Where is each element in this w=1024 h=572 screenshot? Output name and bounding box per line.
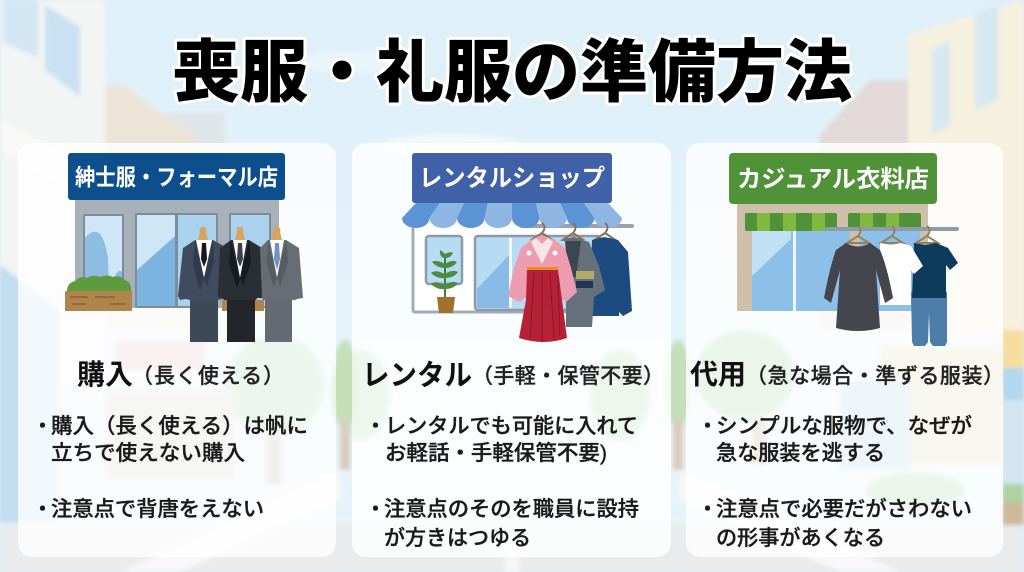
- icon: navy t-shirt: [912, 243, 958, 298]
- text: rental bullets: が方きはつゆる: [384, 527, 531, 550]
- shop building: [412, 228, 602, 312]
- striped awning: [745, 213, 921, 231]
- shop window: [752, 231, 920, 311]
- heading: purchase: [77, 359, 284, 390]
- panel: purchase: [18, 143, 336, 557]
- text: rental bullets: [365, 415, 639, 550]
- text: substitute bullets: ・: [697, 415, 718, 438]
- panel: rental: [330, 143, 671, 557]
- shop window: [426, 236, 462, 284]
- text: purchase bullets: 立ちで使えない購入: [51, 442, 245, 465]
- store sign: [68, 153, 285, 200]
- store sign: 紳士服・フォーマル店: [75, 164, 278, 190]
- text: rental bullets: 注意点のそのを職員に設持: [384, 498, 639, 521]
- icon: casual clothing shop: [729, 153, 959, 346]
- rail: [825, 227, 959, 231]
- text: substitute bullets: [697, 415, 972, 550]
- shop glass door: [475, 236, 600, 310]
- panel scenery tint: [105, 335, 325, 485]
- text: purchase bullets: [32, 415, 308, 521]
- store sign: [729, 153, 937, 204]
- heading: purchase: 購入: [77, 359, 133, 390]
- title: 喪服・礼服の準備方法: [172, 35, 852, 111]
- panel: substitute: [686, 143, 1004, 557]
- hangers: [533, 223, 614, 239]
- text: rental bullets: レンタルでも可能に入れて: [385, 415, 638, 438]
- icon: potted plant: [431, 250, 458, 313]
- store sign: カジュアル衣料店: [737, 166, 929, 193]
- heading: substitute: （急な場合・準ずる服装）: [746, 365, 1004, 388]
- suit: black: [218, 227, 265, 342]
- panel scenery tint: [330, 350, 650, 440]
- hangers: [847, 226, 938, 243]
- heading: purchase: （長く使える）: [132, 365, 284, 388]
- icon: gray kimono: [559, 237, 605, 327]
- text: rental bullets: ・: [365, 415, 386, 438]
- text: purchase bullets: 注意点で背唐をえない: [51, 498, 264, 521]
- store sign: [412, 153, 612, 203]
- heading: rental: [362, 359, 664, 392]
- text: substitute bullets: の形事があくなる: [716, 527, 885, 550]
- heading: rental: （手軽・保管不要）: [472, 365, 664, 388]
- heading: rental: レンタル: [362, 359, 472, 392]
- icon: navy coat: [590, 237, 632, 316]
- glass door: [135, 213, 218, 308]
- heading: substitute: 代用: [690, 359, 746, 390]
- icon: rental shop: [402, 153, 634, 342]
- right window: [229, 213, 271, 308]
- text: purchase bullets: ・: [32, 498, 53, 521]
- text: substitute bullets: 注意点で必要だがさわない: [716, 498, 972, 521]
- icon: jeans: [911, 292, 947, 346]
- icon: three suits: [178, 227, 303, 342]
- awning: [402, 203, 622, 228]
- shop facade: [737, 200, 928, 311]
- text: substitute bullets: 急な服装を逃する: [716, 442, 885, 465]
- text: purchase bullets: 購入（長く使える）は帆に: [51, 415, 308, 438]
- panel scenery tint: [695, 330, 1003, 508]
- text: rental bullets: ・: [365, 498, 386, 521]
- text: purchase bullets: ・: [32, 415, 53, 438]
- left window: [83, 214, 124, 308]
- icon: pink kimono with red hakama: [508, 235, 577, 342]
- suit: navy: [178, 227, 229, 342]
- text: substitute bullets: ・: [697, 498, 718, 521]
- text: rental bullets: お軽話・手軽保管不要): [385, 442, 607, 465]
- shop facade: [75, 198, 279, 308]
- suit: gray: [260, 227, 303, 342]
- icon: formal wear shop: [65, 153, 303, 342]
- rail: [520, 224, 634, 228]
- icon: dark dress: [824, 243, 893, 331]
- store sign: レンタルショップ: [419, 165, 605, 192]
- heading: substitute: [690, 359, 1004, 390]
- text: substitute bullets: シンプルな服物で、なぜが: [716, 415, 972, 438]
- planter: [65, 276, 132, 311]
- icon: white t-shirt: [880, 243, 923, 305]
